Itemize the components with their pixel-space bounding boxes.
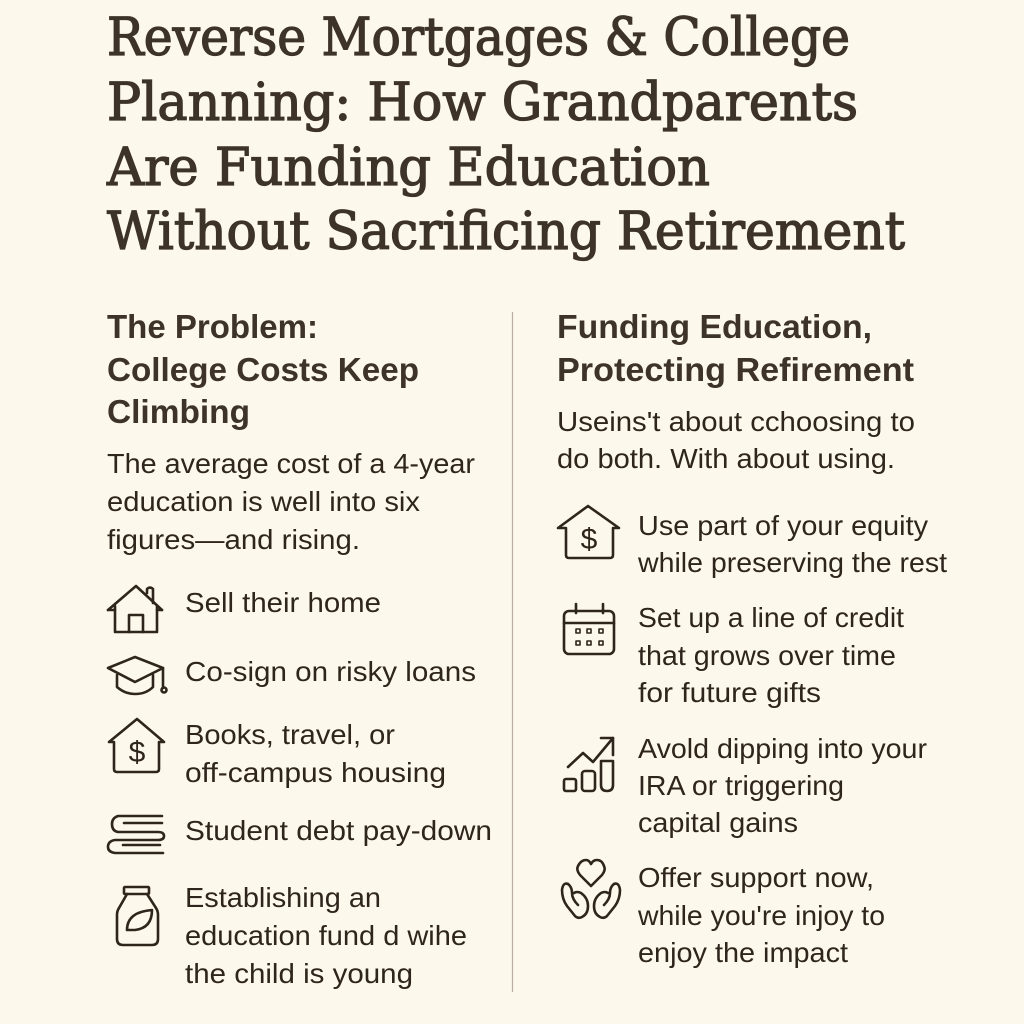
text: books, travel: off-campus housing	[185, 757, 446, 788]
icon: graduation cap	[108, 657, 166, 694]
text: use part of equity: Use part of your equity	[638, 510, 928, 541]
text: education fund: the child is young	[185, 958, 413, 989]
title	[106, 8, 905, 262]
text: offer support: while you're injoy to	[637, 900, 885, 931]
text: education fund: Establishing an	[185, 882, 381, 913]
text: use part of equity: while preserving the rest	[637, 547, 947, 578]
icon: books	[108, 816, 164, 853]
heading: the problem: The Problem:	[107, 308, 318, 345]
text: student debt: Student debt pay-down	[185, 815, 492, 846]
heading: funding education	[557, 308, 914, 388]
text: co-sign: Co-sign on risky loans	[185, 656, 476, 687]
text: line of credit	[638, 602, 904, 708]
icon: house with dollar: $	[129, 736, 146, 769]
icon: house with dollar: $	[581, 523, 598, 556]
text block: funding intro	[557, 406, 915, 474]
text block: problem intro: figures—and rising.	[107, 524, 360, 555]
text: use part of equity	[637, 510, 947, 578]
text: education fund	[185, 882, 467, 989]
title: Reverse Mortgages & College	[107, 8, 850, 68]
panel: funding education	[557, 308, 947, 968]
text block: problem intro	[107, 448, 475, 555]
icon: jar with leaf	[117, 887, 158, 945]
text: books, travel	[185, 719, 446, 788]
text: offer support: enjoy the impact	[638, 937, 848, 968]
text: avoid ira: capital gains	[638, 807, 798, 838]
text: line of credit: Set up a line of credit	[638, 602, 904, 633]
text block: problem intro: education is well into six	[107, 486, 420, 517]
text block: funding intro: Useins't about cchoosing to	[557, 406, 915, 437]
text: books, travel: Books, travel, or	[185, 719, 395, 750]
icon: calendar	[564, 604, 614, 654]
text: avoid ira: Avold dipping into your	[638, 733, 927, 764]
text: avoid ira	[638, 733, 927, 838]
title: Planning: How Grandparents	[107, 73, 858, 133]
text: sell their home: Sell their home	[185, 587, 381, 618]
text: avoid ira: IRA or triggering	[638, 770, 844, 801]
heading: the problem: Climbing	[107, 393, 250, 430]
heading: the problem: College Costs Keep	[107, 351, 419, 388]
text: line of credit: for future gifts	[638, 677, 821, 708]
title: Without Sacrificing Retirement	[107, 202, 905, 262]
text block: problem intro: The average cost of a 4-year	[107, 448, 475, 479]
panel: the problem	[107, 308, 492, 989]
text: offer support	[637, 862, 885, 968]
heading: funding education: Protecting Refirement	[557, 351, 914, 388]
text block: funding intro: do both. With about using.	[557, 443, 895, 474]
icon: growth chart	[564, 738, 613, 791]
heading: the problem	[107, 308, 419, 430]
text: education fund: education fund d wihe	[185, 920, 467, 951]
heading: funding education: Funding Education,	[557, 308, 872, 345]
icon: heart and hands	[562, 860, 620, 918]
text: line of credit: that grows over time	[638, 640, 896, 671]
text: offer support: Offer support now,	[638, 862, 874, 893]
title: Are Funding Education	[106, 138, 710, 198]
icon: house with dollar	[558, 506, 619, 558]
icon: house with dollar	[109, 719, 164, 772]
icon: house	[108, 586, 162, 632]
